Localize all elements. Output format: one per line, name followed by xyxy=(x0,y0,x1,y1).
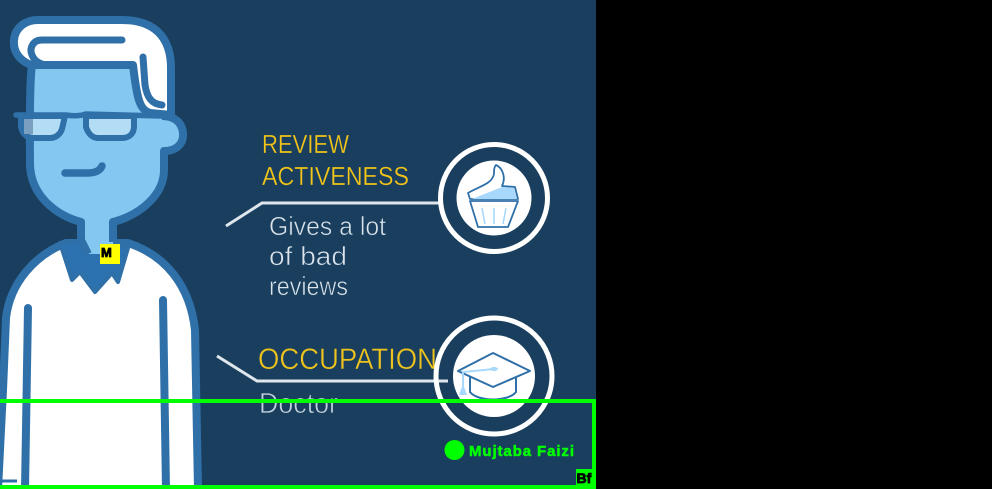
hair side strand xyxy=(143,57,162,105)
cupcake frosting shade xyxy=(472,187,517,199)
green highlight frame xyxy=(0,401,594,487)
character hair xyxy=(14,20,171,115)
character body: shirt xyxy=(0,243,198,489)
heading: review activeness xyxy=(262,129,409,191)
attribution name: Mujtaba Faizi xyxy=(469,443,574,460)
cap tassel xyxy=(463,369,494,388)
text block: review description: of bad xyxy=(269,241,347,271)
text block: review description: reviews xyxy=(269,271,348,301)
panel: dark blue background xyxy=(0,0,596,489)
connector line: review xyxy=(226,203,440,226)
text block: occupation value: Doctor xyxy=(259,388,338,420)
badge disc xyxy=(456,160,532,236)
character illustration xyxy=(0,20,198,489)
tag: Bf: Bf xyxy=(576,470,592,486)
icon: cupcake badge xyxy=(440,144,548,252)
shirt left arm crease xyxy=(25,308,28,489)
heading: review activeness: REVIEW xyxy=(262,129,349,159)
cap board xyxy=(458,353,530,387)
icon: graduation cap badge xyxy=(436,318,552,434)
cupcake wrapper xyxy=(470,201,518,227)
connector line: occupation xyxy=(217,356,448,381)
right lens xyxy=(86,116,134,138)
green attribution dot xyxy=(444,440,464,460)
glasses frame bar xyxy=(16,114,162,116)
shirt hem mark xyxy=(0,480,17,482)
left lens shade xyxy=(24,119,33,134)
left lens xyxy=(21,116,65,138)
character mouth xyxy=(65,166,102,173)
face, neck and ear outline xyxy=(30,65,183,254)
shirt collar xyxy=(60,241,128,292)
badge disc xyxy=(453,335,535,417)
heading: review activeness: ACTIVENESS xyxy=(262,161,409,191)
tassel end xyxy=(459,384,467,395)
cupcake frosting xyxy=(468,165,518,199)
tag: M xyxy=(100,244,120,264)
heading: occupation: OCCUPATION xyxy=(258,343,437,376)
tag: M: M xyxy=(101,245,112,260)
cap base xyxy=(470,376,516,400)
cupcake pleats xyxy=(482,208,506,224)
shirt right arm crease xyxy=(163,300,166,489)
cap button xyxy=(490,367,498,371)
text block: review description: Gives a lot xyxy=(269,211,387,241)
badge ring xyxy=(440,144,548,252)
text block: review description xyxy=(269,211,387,301)
hair inner curl xyxy=(31,40,122,64)
badge ring xyxy=(436,318,552,434)
glasses xyxy=(16,114,162,138)
character face and neck xyxy=(30,65,183,254)
